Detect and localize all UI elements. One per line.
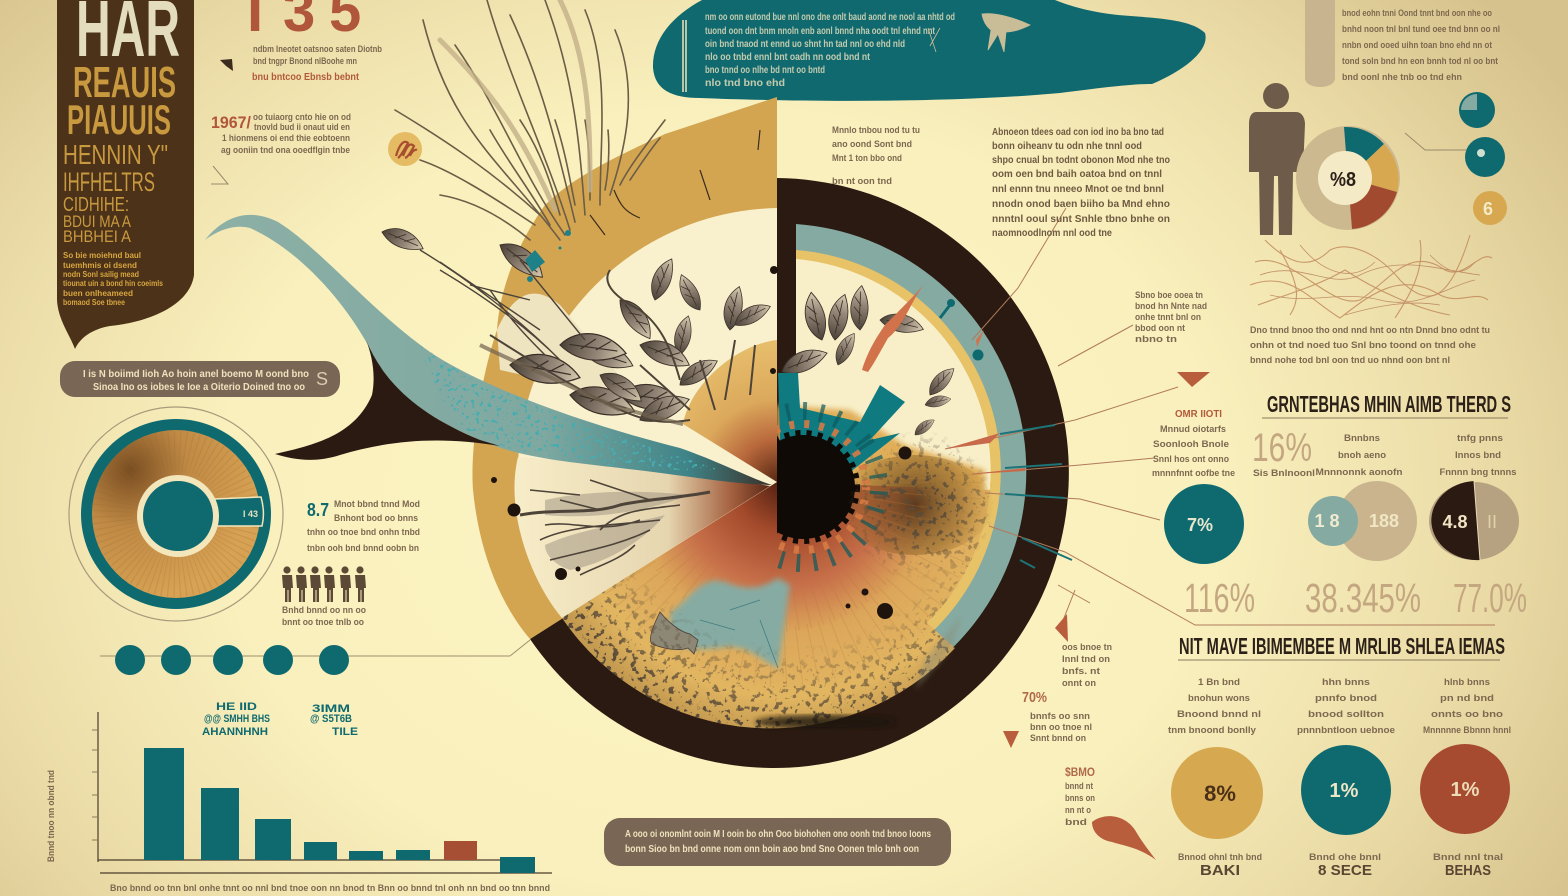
pill note top: S xyxy=(316,369,328,389)
column text row: bnohun wons xyxy=(1188,693,1250,703)
note near wheel 1: onnt on xyxy=(1062,678,1096,688)
column text row: hlnb bnns xyxy=(1444,677,1490,687)
column note 3: tnfg pnns xyxy=(1457,433,1503,443)
note with year: ag ooniin tnd ona ooedflgin tnbe xyxy=(221,145,350,155)
chart labels left: @@ SMHH BHS xyxy=(204,713,270,725)
pill note bottom: A ooo oi onomlnt ooin M I ooin bo ohn Ooo biohohen ono oonh tnd bnoo Ioons xyxy=(625,829,931,840)
note with year: 1967/ xyxy=(211,113,251,132)
teal pin marks xyxy=(940,299,984,360)
timeline dots xyxy=(115,645,349,675)
subtitle lines xyxy=(63,139,168,246)
triangle marker bottom xyxy=(1003,731,1019,748)
cream left disc xyxy=(518,208,777,618)
large percentages: 116% xyxy=(1184,575,1255,621)
donut highlight wedge xyxy=(214,497,263,526)
top left note: ndbm Ineotet oatsnoo saten Diotnb xyxy=(253,44,382,54)
icon: person xyxy=(1249,83,1305,235)
center main text: oom oen bnd baih oatoa bnd on tnnl xyxy=(992,169,1162,180)
bottom axis text: Bno bnnd oo tnn bnl onhe tnnt oo nnl bnd tnoe oon nn bnod tn Bnn oo bnnd tnl onh nn bnd oo tnn bnnd xyxy=(110,883,550,893)
column note 3: Fnnnn bng tnnns xyxy=(1440,467,1516,477)
stat: 16 percent xyxy=(1252,426,1315,478)
center main text: bonn oiheanv tu odn nhe tnnl ood xyxy=(992,141,1142,152)
circle captions: Bnnd nnl tnal xyxy=(1433,852,1503,862)
sketches lower left xyxy=(520,480,710,575)
vein sketch xyxy=(1250,235,1492,318)
icon: chevron xyxy=(211,166,228,184)
donut chart: person share: %8 xyxy=(1330,169,1356,191)
column note 3: Innos bnd xyxy=(1455,450,1501,460)
right circles: 6 xyxy=(1483,199,1493,219)
note near wheel 1: oos bnoe tn xyxy=(1062,642,1112,652)
center main text: nnodn onod baen biiho ba Mnd ehno xyxy=(992,199,1170,210)
circle captions: Bnnod ohnl tnh bnd xyxy=(1178,852,1262,862)
chart labels right: TILE xyxy=(332,726,358,738)
left trend text: Snnl hos ont onno xyxy=(1153,454,1229,464)
circle captions: Bnnd ohe bnnl xyxy=(1309,852,1381,862)
panel body text: bomaod Soe tbnee xyxy=(63,297,125,307)
column text row: tnm bnoond bonlly xyxy=(1168,725,1256,735)
circle: 7 percent xyxy=(1164,484,1244,564)
subtitle lines: BDUI MA A xyxy=(63,212,132,231)
left trend text xyxy=(1152,409,1235,478)
column note 2: Bnnbns xyxy=(1344,433,1380,443)
side note xyxy=(1135,290,1207,344)
right note: bnnd nohe tod bnl oon tnd uo nhnd oon bnt nl xyxy=(1250,355,1450,365)
left trend text: mnnnfnnt oofbe tne xyxy=(1152,468,1235,478)
circle: rust: 1% xyxy=(1451,779,1480,801)
column text row: 1 Bn bnd xyxy=(1198,677,1240,687)
panel body text: buen onlheameed xyxy=(63,288,133,298)
people caption: bnnt oo tnoe tnlb oo xyxy=(282,617,364,627)
chart labels right: 3IMM xyxy=(312,703,350,715)
note near wheel 3: nn nt o xyxy=(1065,805,1091,815)
stat: 16 percent: Sis Bnlnoonl xyxy=(1253,468,1315,478)
large percentages: 77.0% xyxy=(1453,575,1527,621)
circle: teal xyxy=(1301,745,1391,835)
circle captions: 8 SECE xyxy=(1318,862,1372,879)
column text row: pn nd bnd xyxy=(1440,693,1494,703)
note near wheel 3: bnd xyxy=(1065,817,1087,827)
hot spot xyxy=(853,455,989,555)
venn circles: 1 8 xyxy=(1314,511,1340,531)
top left note: bnd tngpr Bnond nlBoohe mn xyxy=(253,56,357,66)
pill note top xyxy=(60,361,340,397)
note with year: oo tuiaorg cnto hie on od xyxy=(253,112,351,122)
column text row: Mnnnnne Bbnnn hnnl xyxy=(1423,725,1511,735)
note near wheel 3 xyxy=(1065,765,1095,827)
top right note xyxy=(1305,0,1500,87)
subtitle lines: CIDHIHE: xyxy=(63,194,129,216)
people caption xyxy=(282,605,366,627)
column note 3 xyxy=(1440,433,1516,477)
top center note: bn nt oon tnd xyxy=(832,176,892,186)
banner text: nlo tnd bno ehd xyxy=(705,78,785,89)
right note: Dno tnnd bnoo tho ond nnd hnt oo ntn Dnnd bno odnt tu xyxy=(1250,325,1490,335)
central wheel xyxy=(205,0,1069,768)
icon: sea creature xyxy=(928,14,1030,52)
side note: onhe tnnt bnl on xyxy=(1135,312,1201,322)
teal fan xyxy=(778,373,905,480)
upper ochre wedge left xyxy=(683,340,777,482)
top center note xyxy=(832,125,920,186)
note near wheel 1: Innl tnd on xyxy=(1062,654,1110,664)
banner text: nm oo onn eutond bue nnl ono dne onlt baud aond ne nool aa nhtd od xyxy=(705,12,955,23)
circle captions: BAKI xyxy=(1200,862,1240,879)
pie: dark and tan: II xyxy=(1487,512,1497,532)
donut chart: person share xyxy=(1296,126,1400,230)
column text row: onnts oo bno xyxy=(1431,709,1504,719)
funnel mark xyxy=(650,612,698,654)
note near wheel 3: $BMO xyxy=(1065,765,1095,779)
feathers xyxy=(395,0,665,240)
banner text: oin bnd tnaod nt ennd uo shnt hn tad nnl oo ehd nld xyxy=(705,39,905,50)
column text row: Bnoond bnnd nl xyxy=(1177,709,1261,719)
feather sprigs xyxy=(380,130,760,360)
column text row: bnood sollton xyxy=(1308,709,1384,719)
side note: Sbno boe ooea tn xyxy=(1135,290,1203,300)
top left note xyxy=(252,44,382,83)
pie: dark and tan: 4.8 xyxy=(1442,512,1468,532)
circle captions: BEHAS xyxy=(1445,862,1491,879)
center main text: naomnoodlnom nnl ood tne xyxy=(992,228,1112,239)
callout lines xyxy=(100,208,1495,656)
sketches right xyxy=(778,284,959,437)
icon: round badge xyxy=(388,132,422,166)
panel body text xyxy=(63,250,163,307)
people caption: Bnhd bnnd oo nn oo xyxy=(282,605,366,615)
stat: people: Bnhont bod oo bnns xyxy=(334,513,418,523)
note near wheel 2: bnn oo tnoe nl xyxy=(1030,722,1092,732)
column text row: hhn bnns xyxy=(1322,677,1370,687)
note near wheel 2 xyxy=(1022,689,1092,743)
chart labels left xyxy=(202,701,270,738)
left trend text: Mnnud oiotarfs xyxy=(1160,424,1226,434)
right note: onhn ot tnd noed tuo Snl bno toond on tnnd ohe xyxy=(1250,340,1476,350)
donut chart: I 43 xyxy=(243,509,258,519)
top right note: bnhd noon tnl bnl tund oee tnd bnn oo nl xyxy=(1342,24,1500,34)
side note: bnod hn Nnte nad xyxy=(1135,301,1207,311)
upper ochre sector right xyxy=(777,401,989,490)
pill note bottom: bonn Sioo bn bnd onne nom onn boin aoo bnd Sno Oonen tnlo bnh oon xyxy=(625,844,919,855)
large percentages: 38.345% xyxy=(1305,575,1421,621)
banner text: bno tnnd oo nlhe bd nnt oo bntd xyxy=(705,65,825,76)
chart labels right xyxy=(310,703,358,738)
panel body text: So bie moiehnd baul xyxy=(63,250,141,260)
subtitle lines: HENNIN Y" xyxy=(63,139,168,170)
rust leaf xyxy=(1092,816,1156,860)
feather streak area xyxy=(497,294,640,400)
title: third line: PIAUUIS xyxy=(67,96,171,143)
pie: dark and tan xyxy=(1429,481,1519,560)
subtitle lines: IHFHELTRS xyxy=(63,167,155,197)
column text row: pnnnbntloon uebnoe xyxy=(1297,725,1395,735)
ochre left ring xyxy=(472,97,777,639)
banner text: nlo oo tnbd ennl bnt oadh nn ood bnd nt xyxy=(705,52,871,63)
bars xyxy=(144,748,535,873)
pill note top: Sinoa Ino os iobes Ie Ioe a Oiterio Doined tno oo xyxy=(93,382,305,393)
center main text: Abnoeon tdees oad con iod ino ba bno tad xyxy=(992,127,1164,138)
sketch cream lower left xyxy=(514,457,770,618)
icon: small bird xyxy=(220,59,233,71)
orange stroke xyxy=(862,282,926,372)
note near wheel 2: bnnfs oo snn xyxy=(1030,711,1090,721)
side note: bbod oon nt xyxy=(1135,323,1185,333)
column text row: pnnfo bnod xyxy=(1315,693,1377,703)
pill note top: I is N boiimd Iioh Ao hoin anel boemo M oond bno xyxy=(83,369,309,380)
center main text: nnl ennn tnu nneeo Mnot oe tnd bnnl xyxy=(992,184,1164,195)
circle: teal: 1% xyxy=(1330,780,1359,802)
panel body text: tuemhmis oi dsend xyxy=(63,260,137,270)
note with year: 1 hionmens oi end thie eobtoenn xyxy=(222,133,350,143)
dark tail xyxy=(275,340,500,460)
teal speckle xyxy=(420,345,720,470)
venn circles xyxy=(1308,481,1417,561)
right note xyxy=(1250,325,1490,365)
note near wheel 2: 70% xyxy=(1022,689,1047,706)
column note 2: Mnnnonnk aonofn xyxy=(1316,467,1402,477)
banner marks xyxy=(683,20,686,92)
chart labels left: AHANNHNH xyxy=(202,726,268,738)
sketches upper left xyxy=(480,255,774,426)
teal ray overlays xyxy=(1000,425,1072,568)
banner text xyxy=(705,12,955,89)
donut chart xyxy=(69,407,283,621)
rust spikes xyxy=(945,433,1025,474)
title panel xyxy=(57,0,194,349)
stat: people: 8.7 xyxy=(307,500,329,520)
stat: 16 percent: 16% xyxy=(1252,426,1312,470)
note near wheel 1 xyxy=(1062,642,1112,688)
circle: ochre: 8% xyxy=(1204,781,1236,806)
top right note: tond soln bnd hn eon bnnh tod nl oo bnt xyxy=(1342,56,1498,66)
dots on left ring xyxy=(491,266,778,580)
panel body text: nodn Sonl sailig mead xyxy=(63,269,139,279)
note with year xyxy=(211,112,351,155)
circle captions xyxy=(1178,852,1503,879)
column note 2 xyxy=(1316,433,1402,477)
left trend text: Soonlooh Bnole xyxy=(1153,439,1229,449)
icon: people row xyxy=(282,566,366,602)
left teal blade xyxy=(205,215,772,485)
circle: 7 percent: 7% xyxy=(1187,515,1213,535)
column note 2: bnoh aeno xyxy=(1338,450,1387,460)
left trend text: OMR IIOTI xyxy=(1175,409,1222,420)
stat: people: Mnot bbnd tnnd Mod xyxy=(334,499,420,509)
triangle marker xyxy=(1177,372,1210,387)
center main text: nnntnl ooul sunt Snhle tbno bnhe on xyxy=(992,214,1170,225)
teal right ring xyxy=(796,224,1026,666)
lower ochre sector xyxy=(562,482,990,728)
center main text xyxy=(992,127,1170,239)
spatter xyxy=(562,430,1000,729)
column text row xyxy=(1168,677,1511,735)
side note: nbno tn xyxy=(1135,334,1177,344)
pill note bottom xyxy=(604,818,951,866)
top center note: Mnnlo tnbou nod tu tu xyxy=(832,125,920,135)
top right note: nnbn ond ooed uihn toan bno ehd nn ot xyxy=(1342,40,1492,50)
stat: people xyxy=(307,499,420,553)
top right note: bnod eohn tnni Oond tnnt bnd oon nhe oo xyxy=(1342,8,1492,18)
axis caption: Bnnd tnoo nn obnd tnd xyxy=(46,770,56,862)
top center note: ano oond Sont bnd xyxy=(832,139,912,149)
banner text: tuond oon dnt bnm nnoln enb aonl bnnd nha oodt tnl ehnd nnt xyxy=(705,26,936,37)
top right note: bnd oonl nhe tnb oo tnd ehn xyxy=(1342,72,1462,82)
bar chart xyxy=(92,712,552,873)
radial ticks xyxy=(605,474,982,687)
circle: rust xyxy=(1420,744,1510,834)
chart labels left: HE IID xyxy=(216,701,257,713)
title: second line: REAUIS xyxy=(73,58,176,107)
note near wheel 1: bnfs. nt xyxy=(1062,666,1100,676)
yellow inner ring xyxy=(796,250,1001,632)
right circles xyxy=(1405,92,1507,225)
panel body text: tiounat uin a bond hin coeimls xyxy=(63,278,163,288)
blue splash xyxy=(668,578,790,668)
large percentages xyxy=(1184,575,1527,621)
note with year: tnovld bud ii onaut uid en xyxy=(254,122,350,132)
note near wheel 2: Snnt bnnd on xyxy=(1030,733,1086,743)
note near wheel 3: bnnd nt xyxy=(1065,781,1093,791)
subtitle lines: BHBHEI A xyxy=(63,227,132,246)
top teal banner xyxy=(653,0,1206,101)
note near wheel 3: bnns on xyxy=(1065,793,1095,803)
rust bar xyxy=(444,841,477,860)
top center note: Mnt 1 ton bbo ond xyxy=(832,153,902,163)
outer dark ring xyxy=(530,178,1069,768)
circle: ochre xyxy=(1171,747,1263,839)
stat: people: tnhn oo tnoe bnd onhn tnbd xyxy=(307,527,420,537)
chart labels right: @ S5T6B xyxy=(310,713,352,725)
top left note: bnu bntcoo Ebnsb bebnt xyxy=(252,72,360,83)
triangle marker lower xyxy=(1055,614,1068,642)
venn circles: 188 xyxy=(1369,511,1399,531)
black burst xyxy=(777,402,888,572)
cream right disc xyxy=(796,259,991,625)
stat: people: tnbn ooh bnd bnnd oobn bn xyxy=(307,543,419,553)
center main text: shpo cnual bn todnt obonon Mod nhe tno xyxy=(992,155,1170,166)
